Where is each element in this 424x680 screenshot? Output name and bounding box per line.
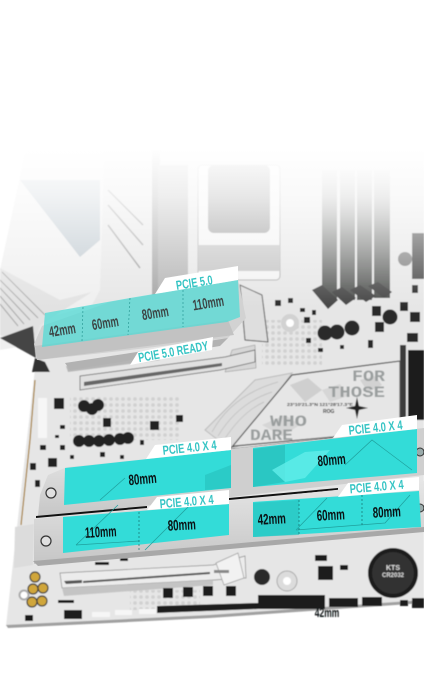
left side chips and capacitors <box>30 398 183 487</box>
80mm: 80mm <box>128 470 157 489</box>
dashed dividers <box>82 290 183 341</box>
label: PCIE 4.0 X 4 lower right <box>338 477 419 497</box>
bottom header connectors <box>25 555 424 621</box>
FOR: FOR <box>352 368 385 386</box>
VRM components <box>275 285 420 352</box>
coordinates: 23°10'21.3"N 121°28'17.3"E <box>287 402 353 407</box>
cyan zone right <box>253 429 417 487</box>
cyan zone left <box>63 504 229 553</box>
DARE: DARE <box>250 427 293 445</box>
white LED panel <box>38 398 47 438</box>
label: PCIE 5.0 <box>155 266 238 294</box>
CPU socket <box>152 150 280 300</box>
label: PCIE 4.0 X 4 upper left: PCIE 4.0 X 4 <box>162 439 218 458</box>
cyan zone right <box>253 491 421 537</box>
80mm: 80mm <box>317 451 346 470</box>
bottom white connectors <box>92 609 156 617</box>
left bezel strip <box>14 524 34 568</box>
dashed dividers <box>139 495 362 552</box>
cyan zone <box>42 280 240 347</box>
60mm: 60mm <box>316 506 345 524</box>
mounting hole <box>281 314 299 332</box>
label: PCIE 5.0 READY: PCIE 5.0 READY <box>137 340 210 366</box>
pattern on cyan zones <box>76 495 410 550</box>
right M.2 bracket <box>240 285 268 342</box>
lower area PCIe slot <box>60 553 246 596</box>
PCIe slot latch <box>225 345 256 372</box>
110mm: 110mm <box>191 292 225 314</box>
80mm: 80mm <box>167 516 196 534</box>
right side connector <box>412 233 424 279</box>
CMOS battery <box>368 548 418 598</box>
THOSE: THOSE <box>328 384 385 402</box>
80mm: 80mm <box>141 303 170 324</box>
top fade overlay <box>0 148 424 308</box>
panel: upper M.2 heatsink <box>36 428 424 518</box>
42mm: 42mm <box>48 320 77 341</box>
I/O shroud <box>0 130 143 358</box>
label: PCIE 4.0 X 4 lower right: PCIE 4.0 X 4 <box>349 478 405 497</box>
ROG: ROG <box>323 409 334 415</box>
110mm: 110mm <box>85 523 117 541</box>
RAM slots <box>312 170 392 309</box>
panel: top M.2 heatsink <box>34 280 246 370</box>
80mm: 80mm <box>372 503 401 521</box>
label: PCIE 4.0 X 4 upper right <box>333 415 417 438</box>
bottom capacitors <box>27 572 48 607</box>
label: PCIE 4.0 X 4 upper left <box>146 437 231 459</box>
42mm: 42mm <box>257 510 286 528</box>
label: PCIE 5.0: PCIE 5.0 <box>175 274 214 293</box>
CMOS battery: KTS <box>386 565 400 572</box>
motherboard base <box>0 130 424 628</box>
central ROG plate <box>205 361 400 451</box>
cyan zone left <box>64 450 231 505</box>
panel: lower M.2 heatsink <box>33 481 424 566</box>
WHO: WHO <box>270 413 308 431</box>
label: PCIE 4.0 X 4 lower left: PCIE 4.0 X 4 <box>159 493 215 512</box>
60mm: 60mm <box>91 313 120 334</box>
PCIe 5.0 slot <box>32 350 255 390</box>
star icon <box>346 397 368 419</box>
label: PCIE 4.0 X 4 lower left <box>147 490 229 512</box>
stray 42mm label: 42mm <box>315 606 339 621</box>
CMOS battery: CR2032 <box>382 573 405 579</box>
pattern on cyan zones <box>100 440 412 500</box>
label: PCIE 4.0 X 4 upper right: PCIE 4.0 X 4 <box>348 419 404 438</box>
